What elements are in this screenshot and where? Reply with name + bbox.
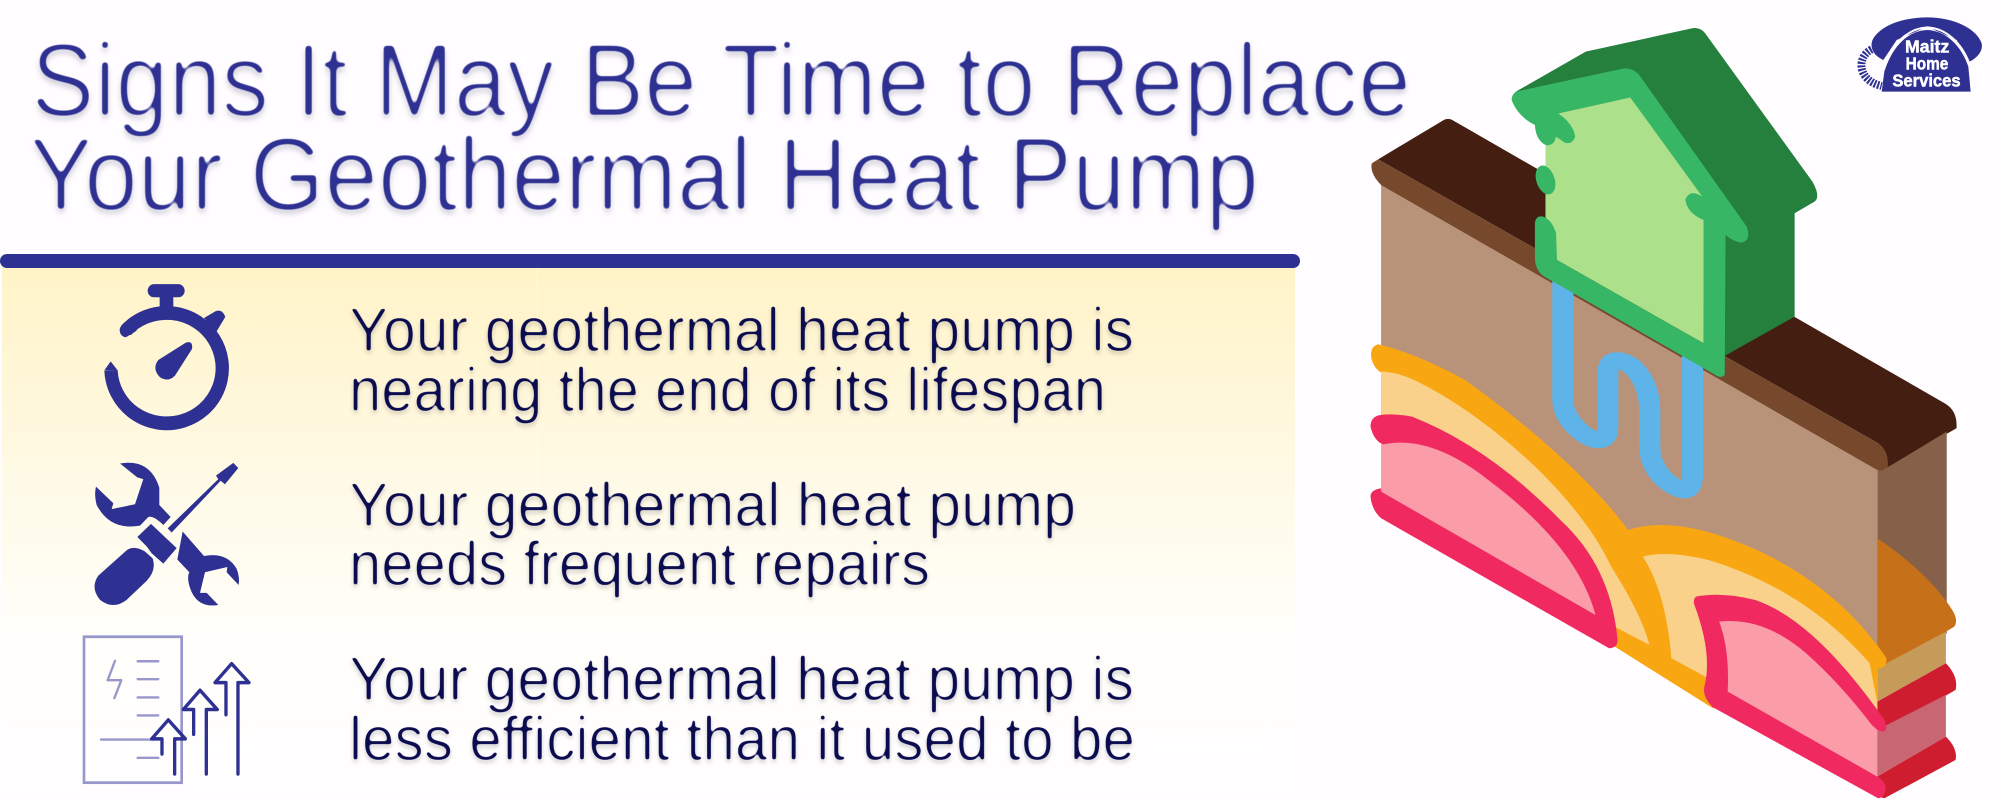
soil side face (1877, 432, 1947, 667)
text: sign 1, end of lifespan: nearing the end of its lifespan (349, 356, 1106, 425)
magma layer left (1371, 414, 1618, 648)
title: Your Geothermal Heat Pump (29, 117, 1259, 233)
magma core right (1719, 621, 1877, 777)
icon: stopwatch (104, 284, 225, 423)
phone handset (1872, 17, 1982, 62)
light orange strata left (1381, 372, 1649, 645)
logo text: Services (1892, 71, 1961, 91)
light orange strata right (1643, 554, 1877, 783)
orange strata (1371, 344, 1887, 708)
soil front face (1381, 180, 1877, 670)
text: sign 1, end of lifespan (349, 296, 1134, 425)
house front wall (1545, 97, 1704, 343)
phone body (1882, 30, 1971, 92)
text: sign 1, end of lifespan: Your geothermal heat pump is (349, 296, 1134, 365)
text: sign 3, less efficient (349, 645, 1135, 774)
divider rule (0, 254, 1300, 268)
illustration: isometric geothermal ground section with house (1371, 28, 1957, 798)
text: sign 3, less efficient: less efficient than it used to be (349, 705, 1135, 774)
logo text: Home (1906, 53, 1948, 73)
logo: Maitz Home Services telephone (1861, 17, 1982, 92)
house outline bump (1533, 164, 1558, 196)
phone coil cord (1861, 49, 1882, 86)
soil ledge (1371, 159, 1888, 471)
text: sign 2, frequent repairs (349, 471, 1076, 599)
panel: gradient background of the signs list (2, 262, 1295, 800)
logo text (1892, 37, 1961, 91)
title (29, 23, 1411, 233)
ground top surface (1378, 119, 1957, 469)
logo arch highlight (1883, 27, 1969, 70)
house front outline (1512, 68, 1748, 377)
house back and side (1516, 28, 1817, 357)
magma core left (1381, 443, 1595, 615)
magma layer right (1694, 595, 1886, 798)
icon: energy bill with rising arrows (84, 637, 249, 783)
side strata (1877, 538, 1956, 798)
text: sign 3, less efficient: Your geothermal heat pump is (349, 645, 1134, 714)
ground loop pipe (1563, 280, 1693, 490)
text: sign 2, frequent repairs: Your geothermal heat pump (349, 471, 1076, 540)
title: Signs It May Be Time to Replace (31, 23, 1411, 139)
logo text: Maitz (1905, 37, 1949, 57)
icon: crossed wrench and screwdriver (95, 463, 239, 605)
text: sign 2, frequent repairs: needs frequent repairs (349, 530, 930, 599)
